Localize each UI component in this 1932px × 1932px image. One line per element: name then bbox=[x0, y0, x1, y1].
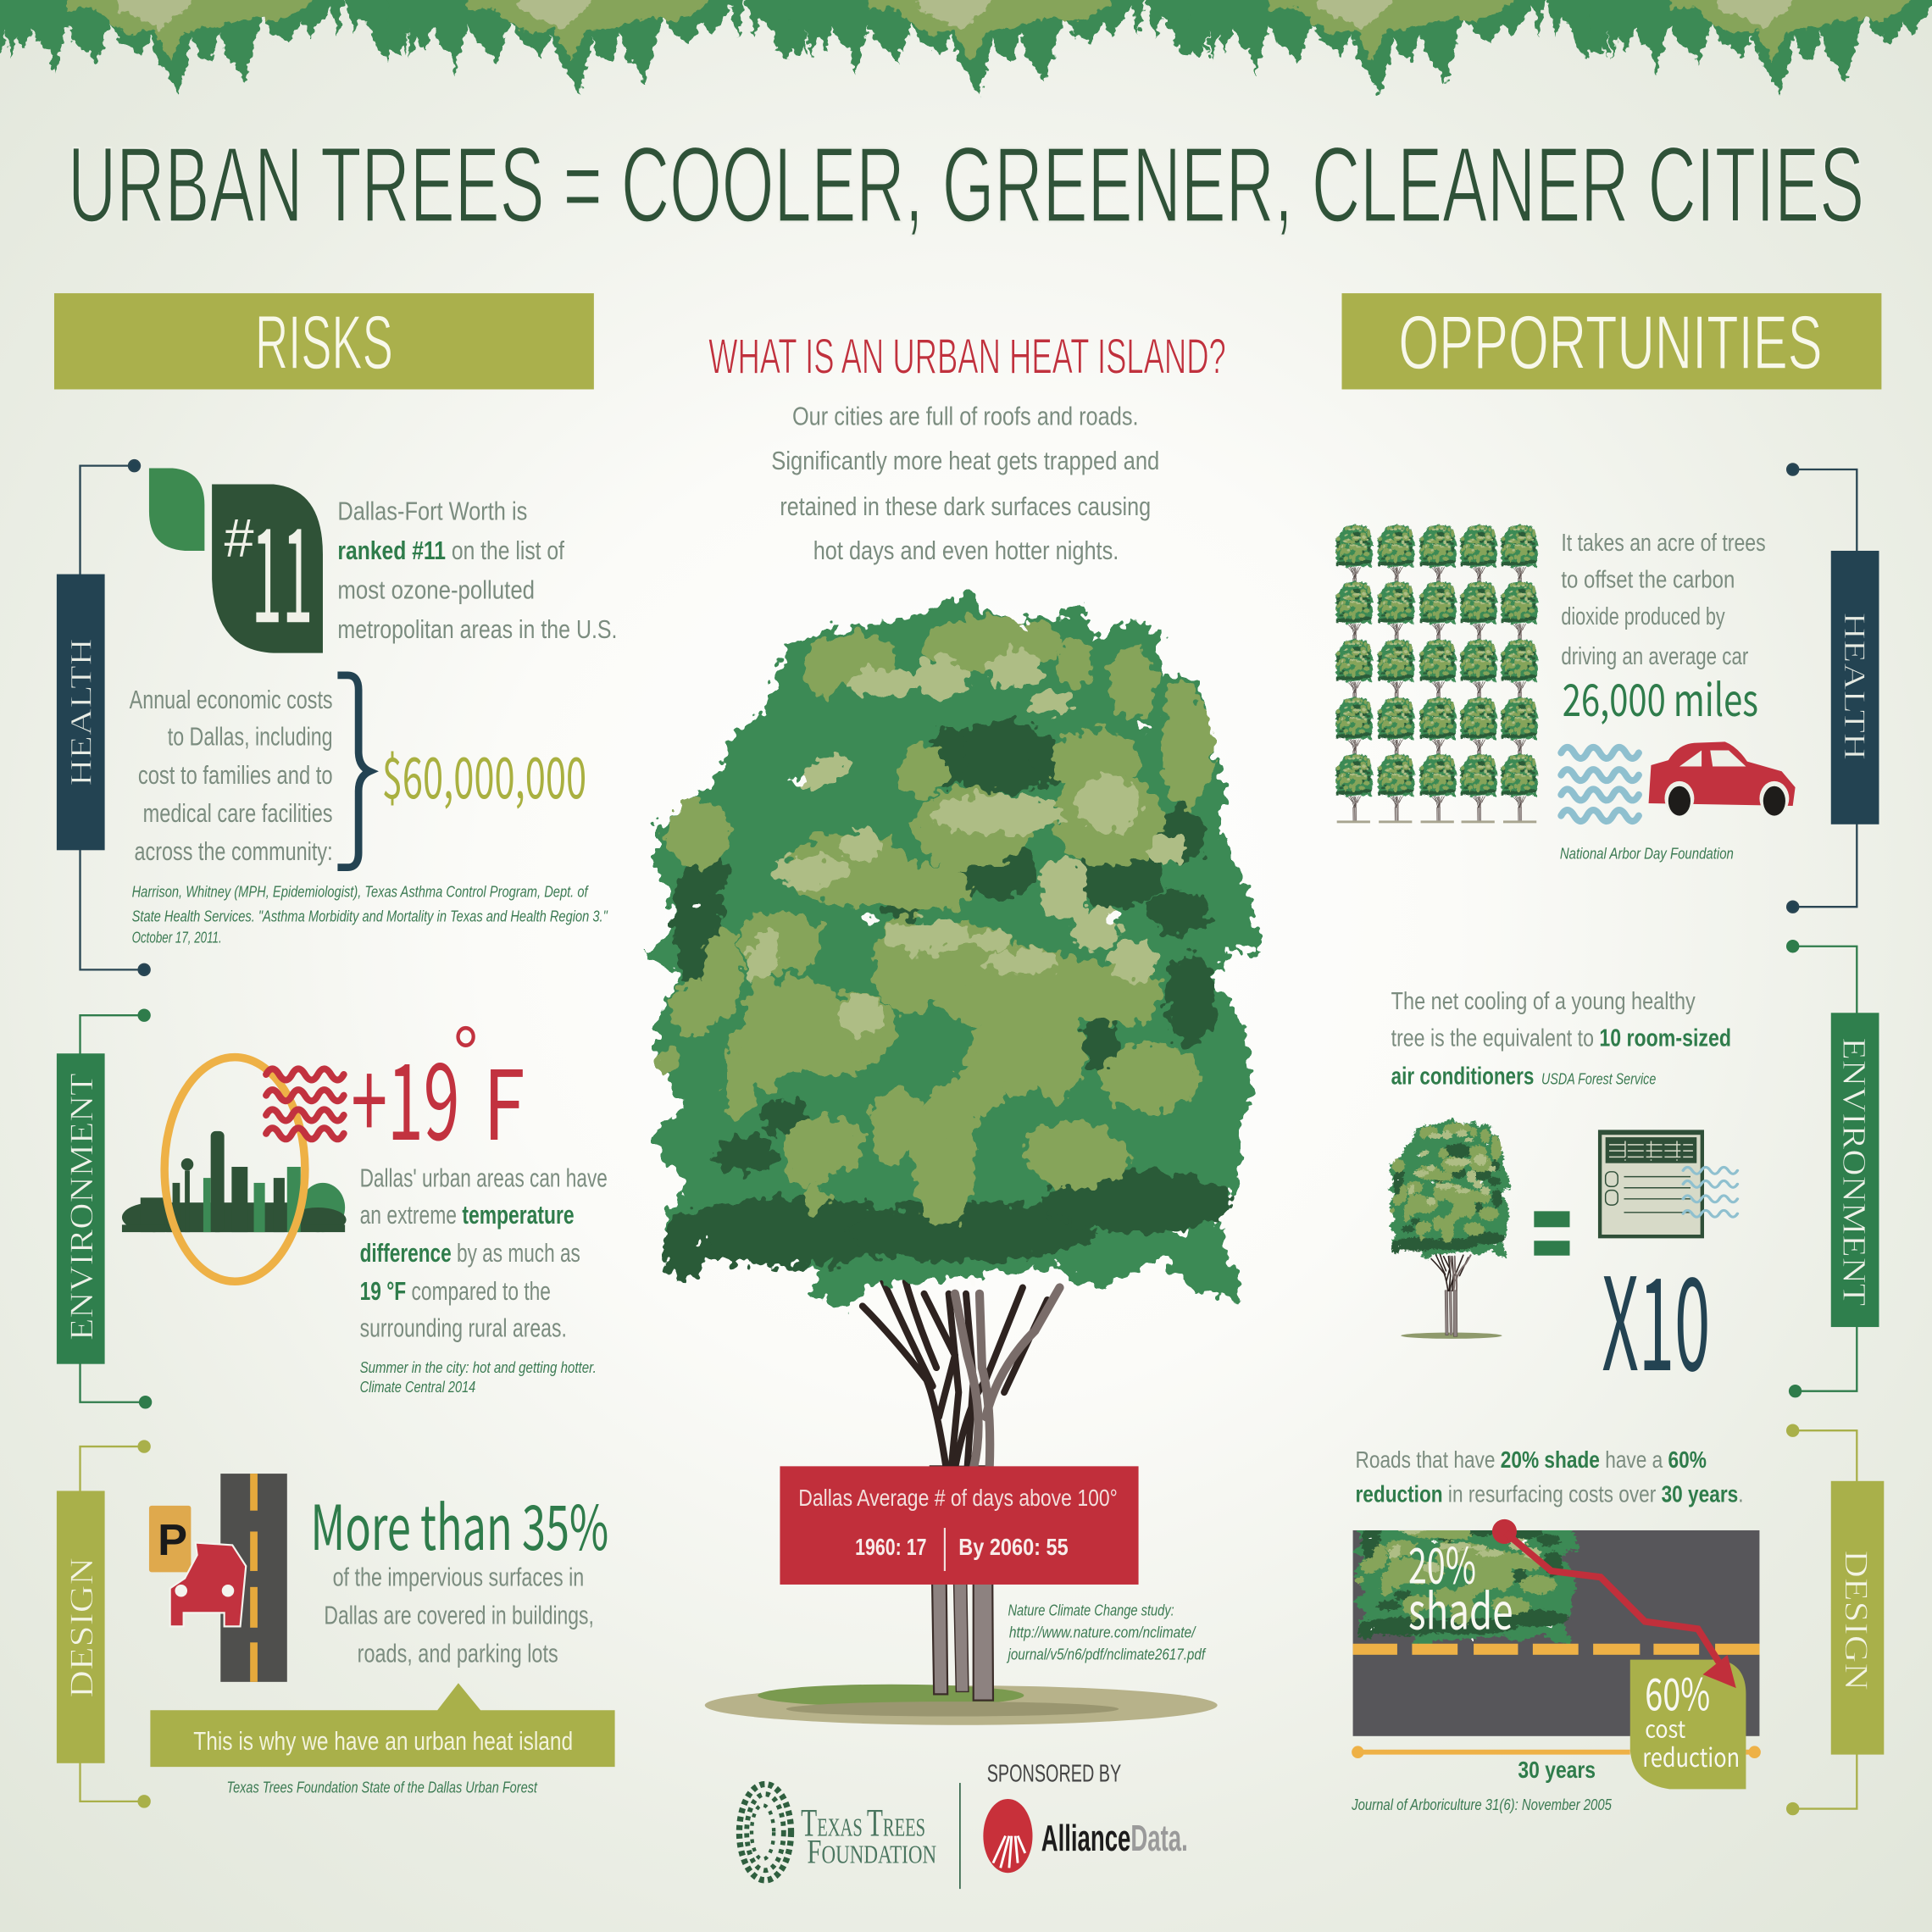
ground shadow bbox=[705, 1685, 1218, 1725]
text: urban heat island explanation: Our cities are full of roofs and roads. bbox=[792, 402, 1139, 431]
design bracket left bbox=[80, 1441, 150, 1807]
label: 60 percent cost reduction: reduction bbox=[1642, 1737, 1740, 1774]
text: urban heat island explanation: retained in these dark surfaces causing bbox=[780, 492, 1151, 521]
panel: risks health bbox=[57, 460, 617, 975]
callout: days above 100 bbox=[780, 1466, 1139, 1585]
text: impervious surfaces: roads, and parking lots bbox=[358, 1640, 558, 1668]
chart: road shade cost reduction bbox=[1352, 1518, 1761, 1790]
illustration: central tree bbox=[648, 589, 1261, 1725]
stat: plus 19 degrees: ° bbox=[452, 1011, 480, 1096]
text: ozone ranking: most ozone-polluted bbox=[337, 576, 535, 605]
text: annual economic costs bbox=[130, 686, 333, 866]
text: net cooling: tree is the equivalent to 10 room-sized bbox=[1391, 1025, 1731, 1052]
text: temperature difference: Dallas' urban areas can have bbox=[360, 1163, 608, 1192]
panel: risks health: 11 bbox=[252, 471, 313, 660]
citation: health: October 17, 2011. bbox=[132, 929, 222, 946]
callout: urban heat island: This is why we have an urban heat island bbox=[193, 1727, 573, 1756]
design bracket right bbox=[1787, 1425, 1857, 1814]
text: urban heat island explanation: Significantly more heat gets trapped and bbox=[771, 447, 1159, 475]
text: temperature difference: surrounding rural areas. bbox=[360, 1314, 567, 1343]
stat: times ten: X10 bbox=[1602, 1222, 1710, 1407]
label: health bbox=[57, 575, 105, 850]
text: annual economic costs: Annual economic costs bbox=[130, 686, 333, 714]
timeline: 30 years bbox=[1352, 1746, 1761, 1783]
icon: cool blue waves bbox=[1561, 747, 1639, 821]
text: urban heat island explanation: hot days and even hotter nights. bbox=[813, 536, 1119, 565]
label: health: HEALTH bbox=[1838, 613, 1872, 760]
label: design bbox=[1831, 1481, 1884, 1755]
panel: opportunities health bbox=[1335, 464, 1879, 913]
label: design bbox=[57, 1491, 105, 1763]
text: impervious surfaces: of the impervious surfaces in bbox=[333, 1563, 584, 1591]
environment bracket right bbox=[1787, 941, 1857, 1396]
text: temperature difference bbox=[360, 1163, 608, 1343]
icon: acre of trees bbox=[1335, 524, 1539, 823]
text: ozone ranking: Dallas-Fort Worth is bbox=[337, 497, 527, 526]
icon: parking sign and car: P bbox=[158, 1516, 187, 1565]
label: 60 percent cost reduction: 60% bbox=[1645, 1659, 1710, 1724]
text: ozone ranking bbox=[337, 497, 617, 644]
citation: environment: Climate Central 2014 bbox=[360, 1379, 475, 1396]
health bracket left bbox=[80, 460, 150, 975]
stat: 26,000 miles: 26,000 miles bbox=[1563, 665, 1758, 730]
citation: nature climate change: Nature Climate Change study: bbox=[1008, 1602, 1174, 1618]
citation: health: State Health Services. "Asthma Morbidity and Mortality in Texas and Health Region 3." bbox=[132, 908, 608, 925]
timeline: 30 years: 30 years bbox=[1518, 1757, 1596, 1783]
icon: small leaf bbox=[149, 469, 204, 551]
icon: red heat waves bbox=[266, 1069, 344, 1139]
text: impervious surfaces bbox=[324, 1563, 594, 1668]
text: acre of trees bbox=[1561, 530, 1766, 670]
label: environment: ENVIRONMENT bbox=[1835, 1037, 1872, 1306]
stat: more than 35 percent: More than 35% bbox=[310, 1479, 608, 1568]
text: roads shade: Roads that have 20% shade have a 60% bbox=[1355, 1446, 1707, 1473]
heading: what is an urban heat island: WHAT IS AN URBAN HEAT ISLAND? bbox=[708, 330, 1226, 385]
text: annual economic costs: across the community: bbox=[134, 837, 333, 866]
callout: urban heat island bbox=[150, 1683, 615, 1767]
label: health: HEALTH bbox=[64, 638, 98, 786]
text: temperature difference: 19 °F compared to the bbox=[360, 1277, 551, 1306]
label: environment bbox=[1831, 1013, 1879, 1327]
logo: alliance data: AllianceData. bbox=[1041, 1818, 1188, 1859]
text: temperature difference: difference by as much as bbox=[360, 1239, 580, 1268]
text: annual economic costs: cost to families and to bbox=[138, 761, 333, 790]
citation: nature climate change bbox=[1006, 1602, 1207, 1663]
top foliage border bbox=[0, 0, 1932, 96]
panel: risks environment bbox=[57, 1010, 608, 1407]
icon: young tree bbox=[1388, 1118, 1511, 1339]
text: temperature difference: an extreme temperature bbox=[360, 1201, 575, 1230]
health bracket right bbox=[1787, 464, 1857, 913]
label: 20 percent shade: 20% bbox=[1408, 1526, 1476, 1597]
text: net cooling: USDA Forest Service bbox=[1541, 1071, 1656, 1088]
callout: days above 100: Dallas Average # of days above 100° bbox=[798, 1485, 1118, 1511]
panel: risks heading: RISKS bbox=[255, 300, 393, 386]
text: ozone ranking: metropolitan areas in the U.S. bbox=[337, 615, 617, 644]
label: design: DESIGN bbox=[1838, 1550, 1874, 1690]
icon: red car bbox=[1649, 741, 1796, 816]
text: acre of trees: driving an average car bbox=[1561, 643, 1749, 670]
icon: ranked number 11 leaf: # bbox=[225, 508, 254, 569]
icon: brace bbox=[337, 675, 369, 868]
citation: health: Harrison, Whitney (MPH, Epidemiologist), Texas Asthma Control Program, Dept. of bbox=[132, 884, 589, 901]
stat: plus 19 degrees: +19 bbox=[351, 1018, 459, 1171]
panel: opportunities design bbox=[1351, 1425, 1884, 1814]
icon: city skyline bbox=[122, 1131, 347, 1232]
citation: environment: Summer in the city: hot and getting hotter. bbox=[360, 1359, 597, 1376]
icon: heat ring bbox=[164, 1058, 305, 1281]
text: urban heat island explanation bbox=[771, 402, 1159, 565]
text: impervious surfaces: Dallas are covered in buildings, bbox=[324, 1601, 594, 1629]
text: roads shade bbox=[1355, 1446, 1744, 1507]
text: acre of trees: to offset the carbon bbox=[1561, 567, 1735, 594]
callout: days above 100: By 2060: 55 bbox=[958, 1534, 1069, 1560]
text: roads shade: reduction in resurfacing costs over 30 years. bbox=[1355, 1481, 1744, 1507]
logo: texas trees foundation: FOUNDATION bbox=[807, 1833, 936, 1871]
stat: plus 19 degrees: F bbox=[483, 1028, 525, 1168]
olive cost reduction leaf bbox=[1630, 1660, 1746, 1789]
icon: parking sign and car bbox=[149, 1506, 246, 1626]
label: environment bbox=[57, 1053, 105, 1364]
panel: risks heading bbox=[54, 293, 594, 389]
citation: design: Texas Trees Foundation State of the Dallas Urban Forest bbox=[227, 1779, 538, 1796]
text: acre of trees: It takes an acre of trees bbox=[1561, 530, 1766, 557]
icon: ranked number 11 leaf bbox=[212, 471, 323, 660]
panel: risks design bbox=[57, 1441, 615, 1807]
text: net cooling bbox=[1391, 988, 1731, 1091]
icon: equals sign bbox=[1534, 1211, 1569, 1256]
citation: environment bbox=[360, 1359, 597, 1396]
text: annual economic costs: to Dallas, including bbox=[168, 723, 333, 752]
label: 20 percent shade bbox=[1408, 1526, 1513, 1643]
logo: alliance data bbox=[983, 1799, 1188, 1873]
text: annual economic costs: medical care facilities bbox=[143, 799, 333, 828]
citation: nature climate change: http://www.nature.com/nclimate/ bbox=[1009, 1624, 1196, 1641]
icon: road bbox=[220, 1474, 287, 1682]
environment bracket left bbox=[80, 1010, 151, 1407]
stat: sixty million dollars: $60,000,000 bbox=[382, 733, 586, 815]
label: 60 percent cost reduction: cost bbox=[1645, 1710, 1686, 1744]
text: ozone ranking: ranked #11 on the list of bbox=[337, 536, 564, 565]
text: acre of trees: dioxide produced by bbox=[1561, 603, 1725, 630]
text: net cooling: The net cooling of a young healthy bbox=[1391, 988, 1696, 1015]
callout: days above 100: 1960: 17 bbox=[855, 1534, 926, 1560]
citation: health bbox=[132, 884, 608, 946]
icon: air conditioner bbox=[1598, 1130, 1737, 1238]
red trend arrow bbox=[1492, 1519, 1736, 1688]
citation: journal of arboriculture: Journal of Arboriculture 31(6): November 2005 bbox=[1351, 1796, 1613, 1813]
citation: nature climate change: journal/v5/n6/pdf/nclimate2617.pdf bbox=[1006, 1646, 1207, 1663]
text: net cooling: air conditioners bbox=[1391, 1063, 1534, 1091]
logo: texas trees foundation: TEXAS TREES bbox=[801, 1802, 925, 1846]
label: design: DESIGN bbox=[64, 1557, 100, 1698]
logo: texas trees foundation bbox=[739, 1785, 936, 1880]
citation: arbor day: National Arbor Day Foundation bbox=[1560, 845, 1734, 862]
sponsored by: SPONSORED BY bbox=[987, 1761, 1121, 1788]
label: 60 percent cost reduction bbox=[1642, 1659, 1740, 1774]
label: 20 percent shade: shade bbox=[1408, 1572, 1513, 1643]
label: health bbox=[1831, 551, 1879, 824]
label: environment: ENVIRONMENT bbox=[64, 1073, 100, 1341]
panel: opportunities environment bbox=[1388, 941, 1879, 1407]
